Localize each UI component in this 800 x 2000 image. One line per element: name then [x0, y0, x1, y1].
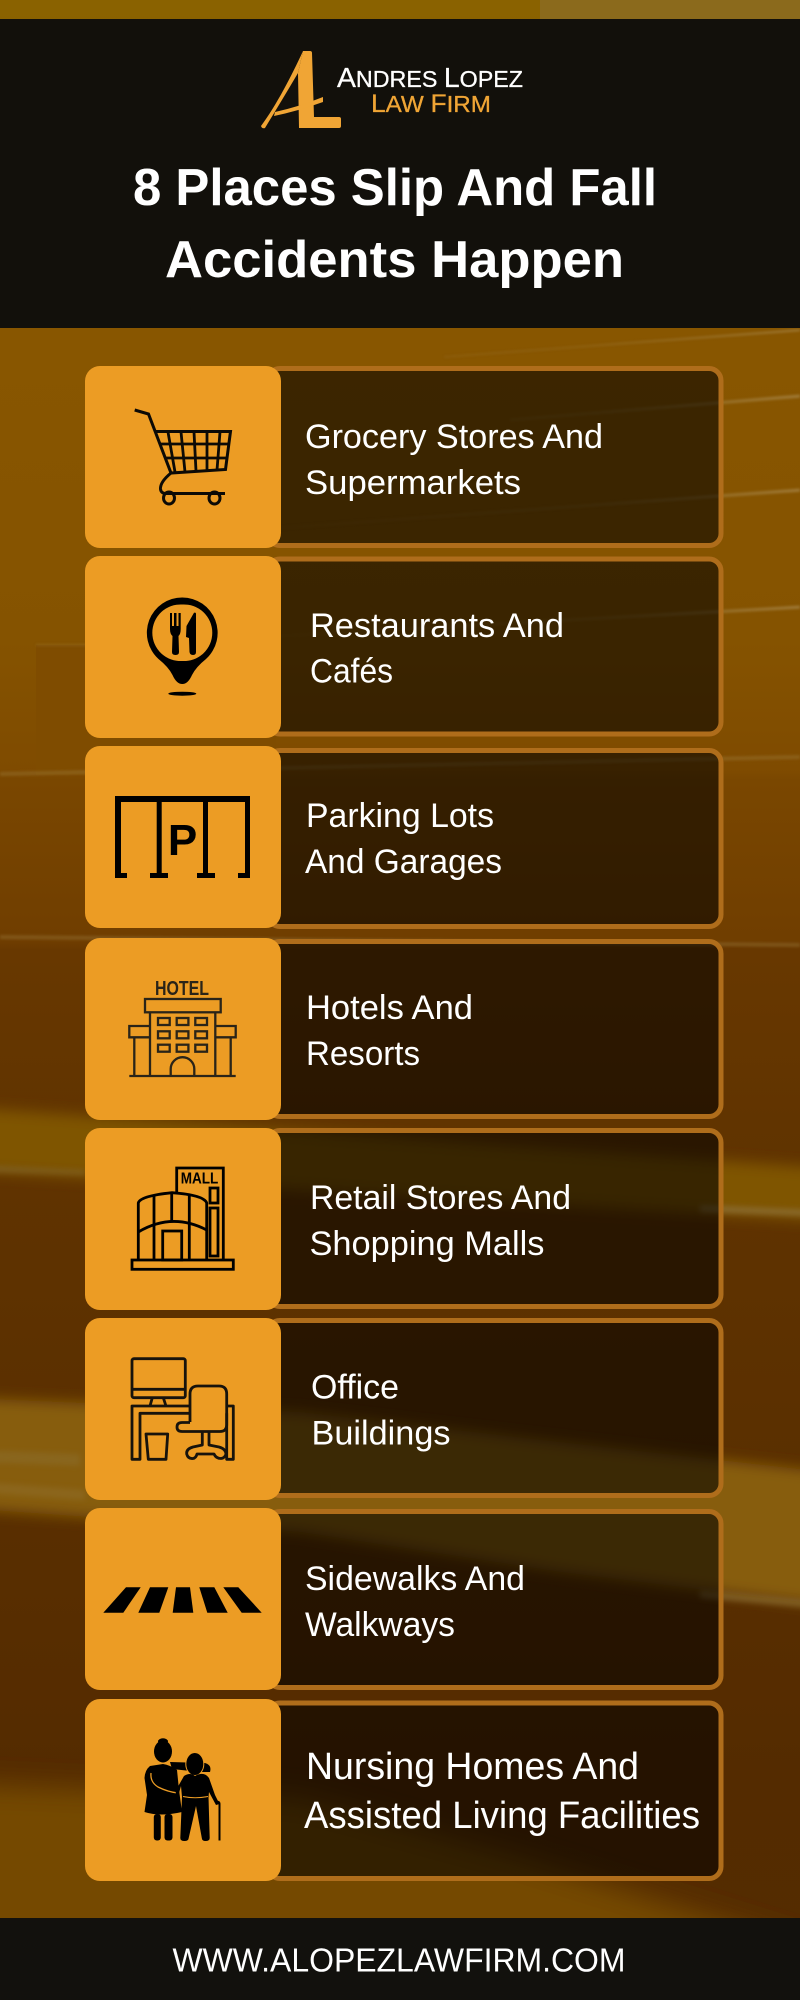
- label: Grocery Stores And: [305, 418, 603, 456]
- logo mark: [261, 51, 341, 128]
- icon: shopping mall: [132, 1168, 233, 1269]
- label: Resorts: [306, 1035, 420, 1073]
- label: [305, 418, 603, 502]
- label: Sidewalks And: [305, 1560, 525, 1598]
- label: [304, 1746, 700, 1837]
- icon: office desk: [132, 1359, 233, 1459]
- label: Assisted Living Facilities: [304, 1795, 700, 1837]
- text panel: [268, 750, 721, 926]
- text panel: [268, 559, 721, 734]
- title: 8 Places Slip And Fall: [133, 159, 657, 217]
- label: [306, 989, 473, 1073]
- icon: shopping cart: [135, 410, 230, 504]
- card: nursing homes: [85, 1699, 721, 1881]
- icon: parking bays: P: [168, 816, 197, 865]
- logo text: law firm: LAW FIRM: [371, 90, 491, 118]
- label: Office: [311, 1368, 399, 1406]
- label: Cafés: [310, 652, 393, 690]
- icon tile: [85, 1699, 281, 1881]
- label: [311, 1368, 450, 1452]
- icon: shopping mall: MALL: [181, 1170, 218, 1188]
- text panel: [268, 1512, 721, 1688]
- text panel: [268, 368, 721, 546]
- label: [305, 1560, 525, 1644]
- card: retail stores: [85, 1128, 721, 1310]
- logo text: firm name: ANDRES LOPEZ: [337, 62, 523, 93]
- label: Hotels And: [306, 989, 473, 1027]
- icon: restaurant pin: [147, 597, 218, 696]
- text panel: [268, 1130, 721, 1306]
- text panel: [268, 1703, 721, 1878]
- icon: nurse helping elderly person: [144, 1738, 220, 1841]
- header band: [0, 19, 800, 328]
- text panel: [268, 1320, 721, 1496]
- label: Parking Lots: [306, 797, 494, 835]
- label: [310, 1179, 571, 1263]
- website url: WWW.ALOPEZLAWFIRM.COM: [172, 1942, 626, 1978]
- label: Supermarkets: [305, 464, 521, 502]
- card: hotels: [85, 938, 721, 1120]
- card: sidewalks: [85, 1508, 721, 1690]
- label: [305, 797, 502, 881]
- icon: parking bays: [115, 796, 250, 878]
- icon tile: [85, 366, 281, 548]
- label: Buildings: [312, 1414, 450, 1452]
- icon tile: [85, 1508, 281, 1690]
- fork: [170, 613, 181, 655]
- logo: [261, 51, 523, 128]
- icon tile: [85, 1128, 281, 1310]
- icon tile: [85, 746, 281, 928]
- card: grocery stores: [85, 366, 721, 548]
- title: [133, 159, 657, 289]
- label: Restaurants And: [310, 607, 564, 645]
- card: office buildings: [85, 1318, 721, 1500]
- icon: hotel: [129, 977, 236, 1076]
- title: Accidents Happen: [165, 231, 624, 289]
- text panel: [268, 942, 721, 1116]
- knife: [186, 613, 196, 655]
- icon: crosswalk: [103, 1587, 262, 1613]
- label: [310, 607, 564, 690]
- label: Shopping Malls: [310, 1225, 544, 1263]
- icon tile: [85, 556, 281, 738]
- label: And Garages: [305, 843, 502, 881]
- icon tile: [85, 1318, 281, 1500]
- card: restaurants: [85, 556, 721, 738]
- label: Nursing Homes And: [306, 1746, 639, 1788]
- icon: hotel: HOTEL: [155, 977, 209, 1000]
- icon tile: [85, 938, 281, 1120]
- label: Retail Stores And: [310, 1179, 571, 1217]
- card: parking: [85, 746, 721, 928]
- footer band: [0, 1918, 800, 2000]
- label: Walkways: [305, 1606, 455, 1644]
